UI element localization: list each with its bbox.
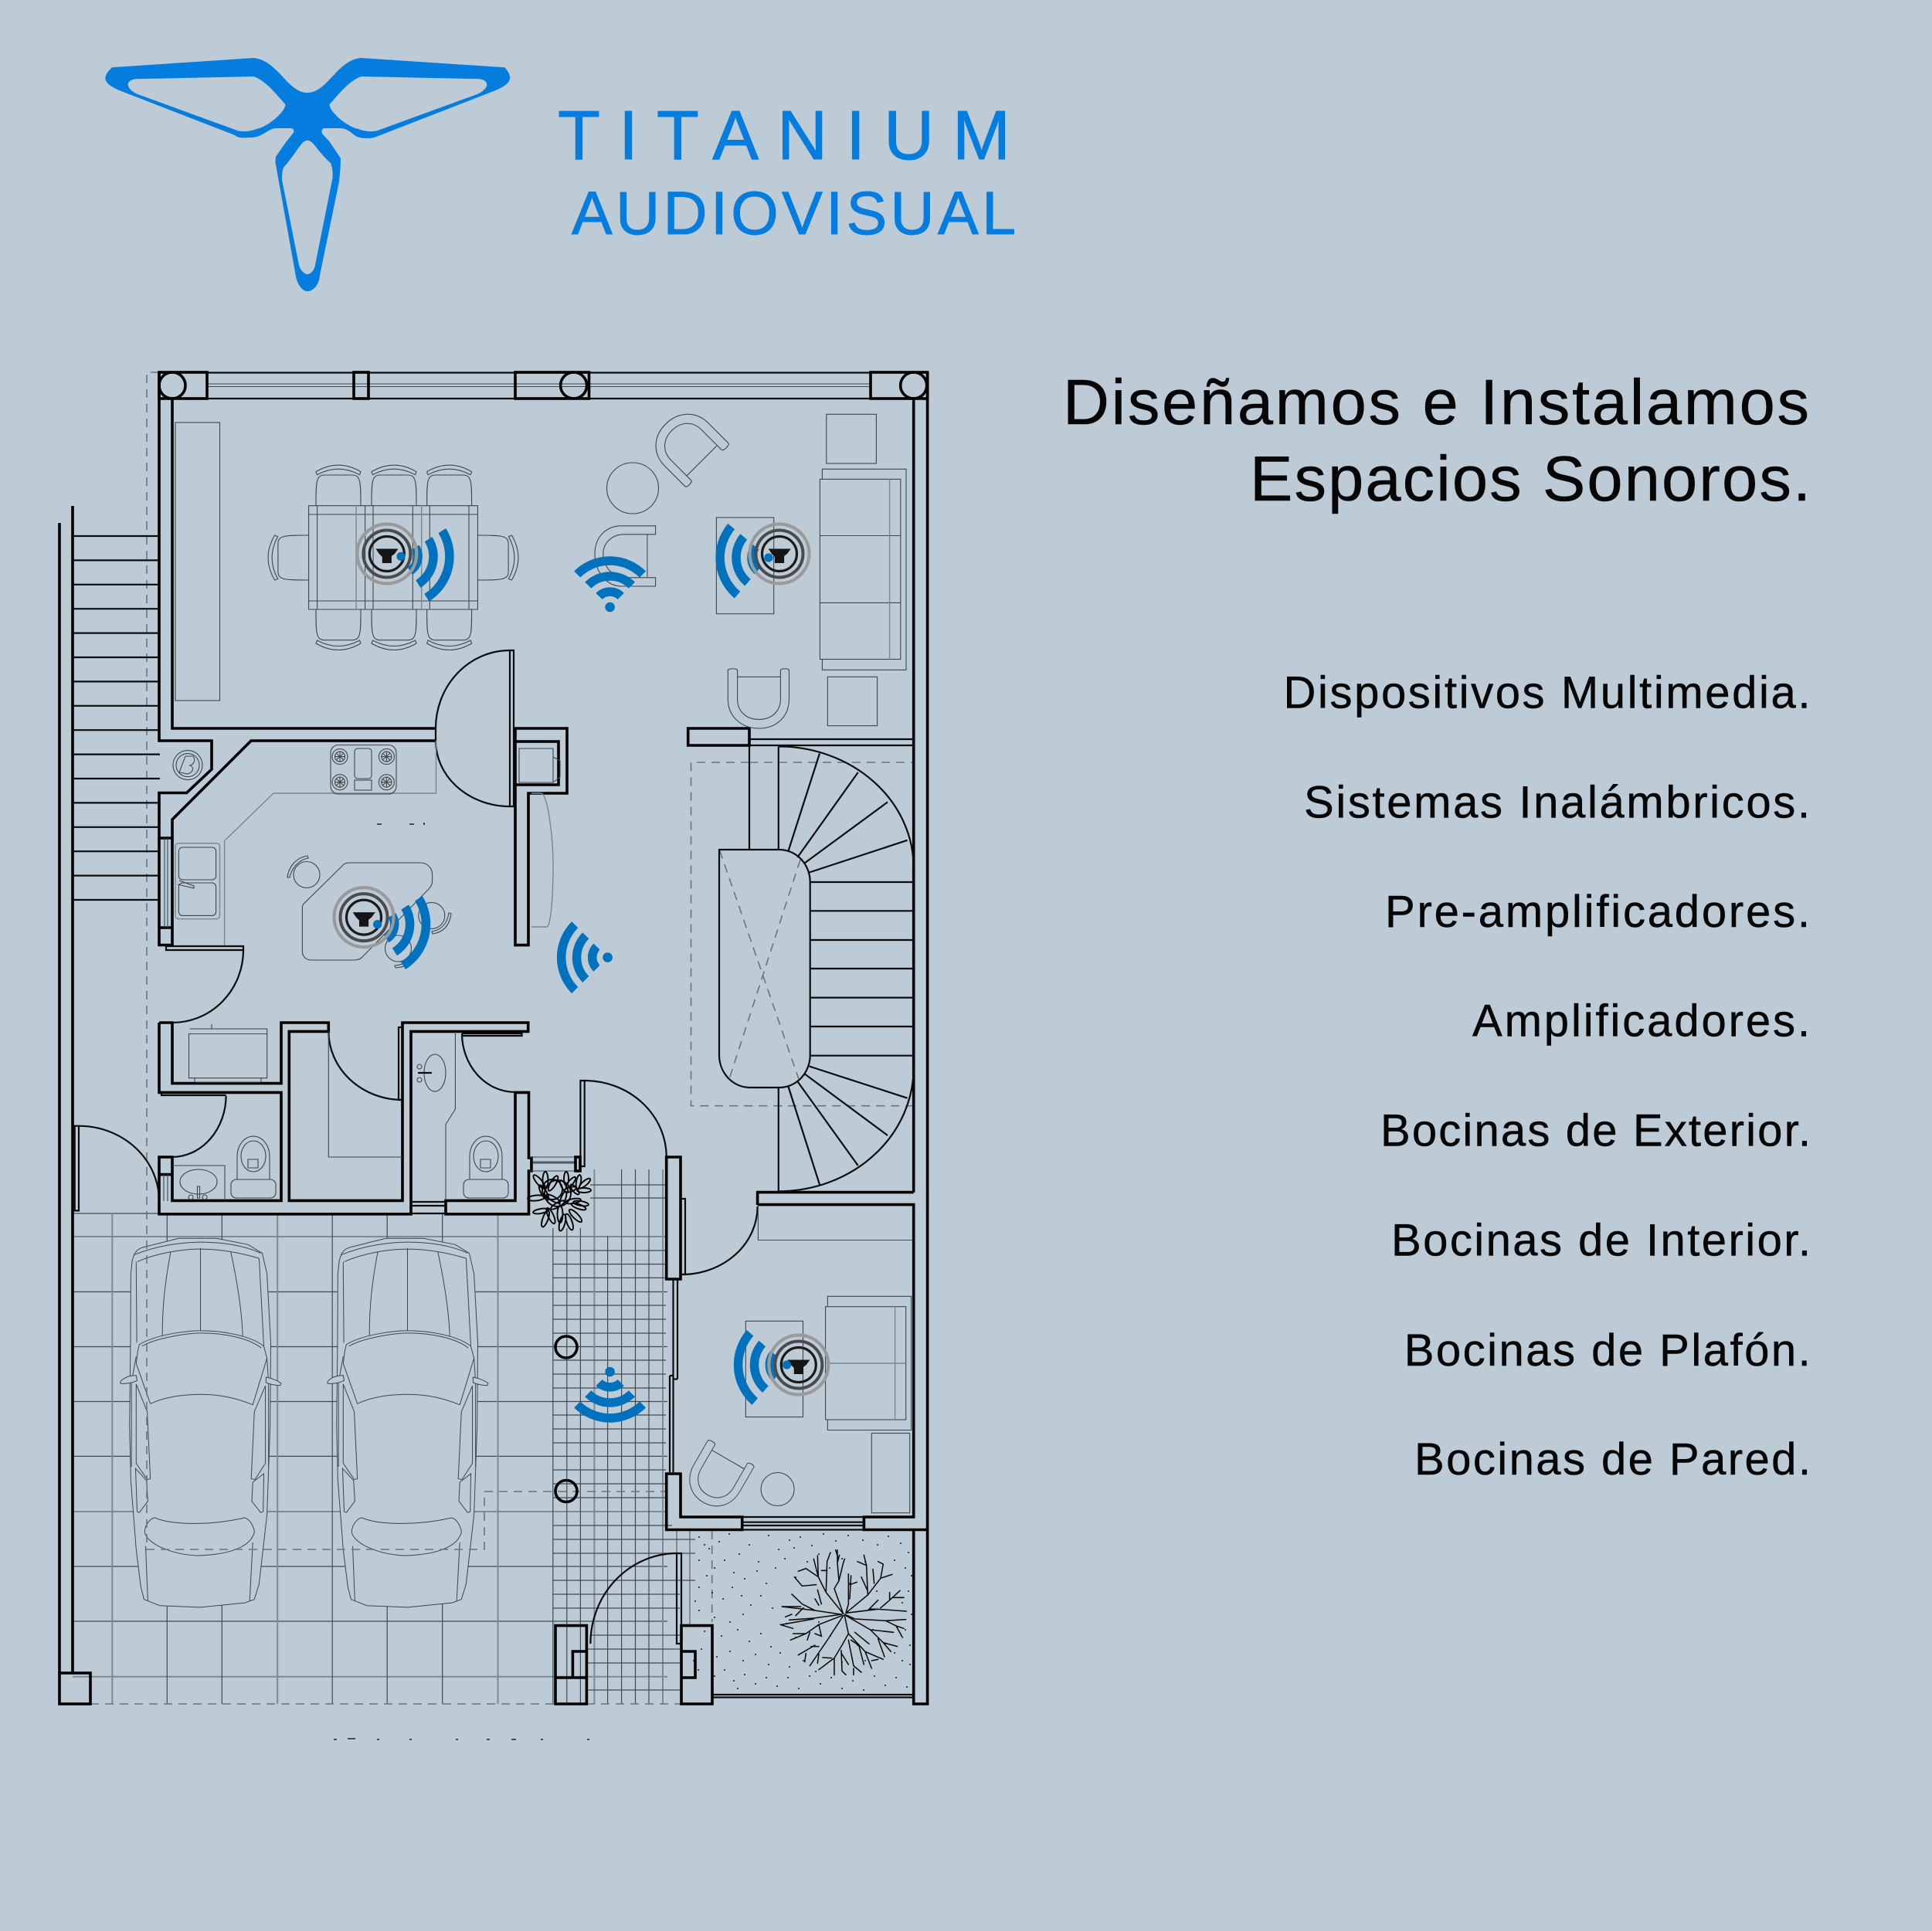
kitchen counter, stove, sink <box>175 741 560 1082</box>
wall bathroom column <box>173 751 202 780</box>
icon: speaker dining <box>357 524 456 601</box>
icon: speaker kitchen <box>334 887 433 969</box>
floor plan <box>59 372 928 1739</box>
lower room furniture <box>680 1205 912 1515</box>
services list <box>1284 668 1811 1485</box>
icon: logo mark <box>105 58 510 291</box>
icon: wifi signal top <box>577 561 643 612</box>
living room furniture <box>595 402 906 728</box>
dashed construction lines <box>90 372 914 1704</box>
dining table and chairs <box>268 465 518 650</box>
services list: Bocinas de Plafón. <box>1404 1325 1811 1376</box>
services list: Dispositivos Multimedia. <box>1284 668 1811 718</box>
windows <box>164 838 914 1698</box>
icon: wifi signal centre <box>562 925 613 990</box>
services list: Pre-amplificadores. <box>1385 887 1810 937</box>
doors <box>75 650 758 1644</box>
walls <box>159 372 928 1704</box>
garden speckle <box>694 1534 912 1690</box>
services list: Bocinas de Exterior. <box>1380 1106 1811 1156</box>
spiral stair <box>719 745 914 1191</box>
walkway tile grid <box>553 1169 695 1704</box>
icon: speaker living <box>717 524 810 596</box>
heading: Espacios Sonoros. <box>1250 443 1811 514</box>
driveway grid <box>73 1213 667 1704</box>
car two <box>328 1238 488 1607</box>
logo word: AUDIOVISUAL: AUDIOVISUAL <box>572 178 1016 247</box>
logo: Titanium Audiovisual <box>105 58 1016 291</box>
driveway columns and entrance piers <box>555 1336 712 1704</box>
icon: wifi signal walkway <box>577 1367 643 1418</box>
kitchen island and stools <box>287 856 451 968</box>
tree <box>780 1550 906 1675</box>
stray marks <box>334 823 589 1739</box>
sideboard <box>175 423 219 701</box>
heading <box>1063 366 1811 514</box>
potted plant <box>528 1172 592 1232</box>
heading: Diseñamos e Instalamos <box>1063 366 1809 438</box>
services list: Sistemas Inalámbricos. <box>1304 777 1810 827</box>
logo word: TITANIUM: TITANIUM <box>558 97 1010 175</box>
car one <box>121 1238 281 1607</box>
icon: speaker lower room <box>736 1332 828 1403</box>
top window band with columns <box>159 372 928 399</box>
left exterior stair <box>59 506 160 1704</box>
services list: Amplificadores. <box>1472 996 1810 1047</box>
services list: Bocinas de Interior. <box>1391 1216 1811 1266</box>
bathrooms <box>172 1031 508 1200</box>
services list: Bocinas de Pared. <box>1414 1434 1811 1485</box>
